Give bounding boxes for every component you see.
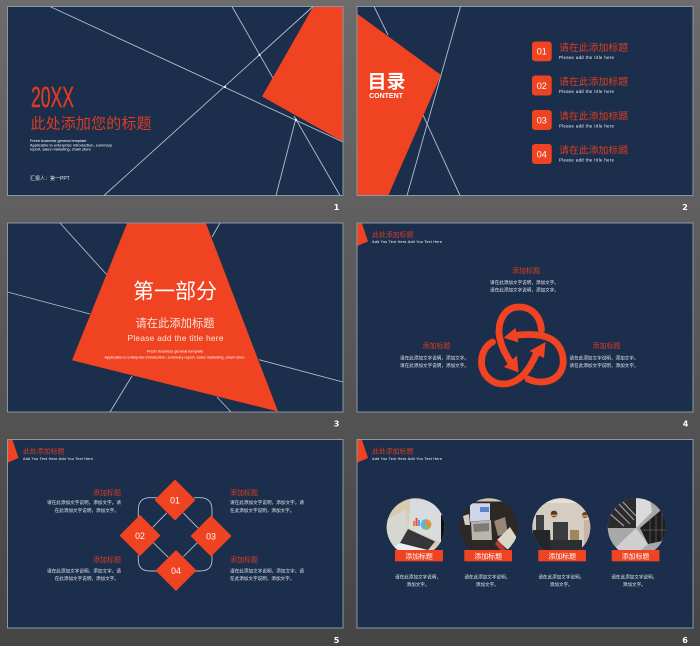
item 04: 请在此添加标题 — [559, 144, 628, 156]
caption 4 — [611, 573, 657, 588]
text block bottom right — [230, 555, 304, 582]
year heading: 20XX — [31, 82, 74, 114]
text block top right — [230, 488, 304, 514]
photo: clothing shop — [531, 498, 592, 551]
item 02: Please add the title here — [559, 89, 615, 94]
description: Applicable to enterprise introduction, summary report, sales marketing, chain store — [104, 354, 244, 360]
photo: desk from above — [459, 497, 519, 552]
description: Fresh business general template — [147, 348, 203, 354]
item 04 — [532, 144, 628, 164]
description: report, sales marketing, chain store — [30, 146, 91, 152]
corner flag — [358, 440, 368, 462]
label bar 3: 添加标题 — [548, 551, 576, 560]
panel: slide 3 section — [8, 223, 343, 412]
caption 4: 请在此添加文字说明， — [611, 573, 657, 580]
diamond 03: 03 — [206, 531, 216, 541]
label bar 3 — [538, 550, 586, 561]
icon: three interlocking arrows — [482, 307, 563, 384]
panel: slide 6 photo row — [357, 440, 693, 628]
background lines — [374, 6, 460, 196]
item 04: Please add the title here — [559, 158, 615, 162]
item 03: 请在此添加标题 — [559, 110, 628, 122]
text block bottom left: 在此添加文字说明，添加文字。 — [55, 575, 119, 582]
caption 2 — [464, 573, 510, 588]
right text block: 请在此添加文字说明，添加文字。 — [570, 362, 638, 369]
caption 1 — [395, 573, 441, 588]
left text block: 请在此添加文字说明，添加文字。 — [400, 354, 469, 361]
slide header: 此处添加标题 — [372, 230, 413, 239]
caption 4: 添加文字。 — [623, 581, 646, 588]
caption 1: 请在此添加文字说明， — [395, 573, 441, 580]
diamond 04 — [156, 550, 196, 591]
presenter: 汇报人：第一PPT — [30, 175, 70, 182]
text block bottom left — [47, 555, 121, 582]
panel: slide 4 cycle diagram — [357, 223, 693, 412]
diamond 01 — [154, 480, 196, 520]
text block bottom right: 请在此添加文字说明，添加文字。请 — [230, 567, 304, 574]
slide subheader: Add You Text Here Add You Text Here — [23, 457, 93, 461]
text block top left: 添加标题 — [93, 488, 121, 497]
english subtitle: Please add the title here — [128, 333, 224, 343]
label bar 4: 添加标题 — [622, 551, 649, 560]
top text block: 请在此添加文字说明，添加文字。 — [490, 279, 559, 286]
diamond 02 — [120, 515, 160, 556]
caption 3: 添加文字。 — [550, 581, 573, 588]
corner flag — [358, 224, 368, 246]
content label: CONTENT — [369, 93, 404, 100]
item 01 — [532, 41, 628, 61]
label bar 2 — [464, 550, 512, 561]
page number 5: 5 — [334, 636, 340, 645]
panel: slide 5 diamond diagram — [8, 440, 343, 628]
page number 2: 2 — [682, 203, 688, 212]
caption 3: 请在此添加文字说明， — [538, 573, 584, 580]
background line network — [50, 6, 343, 196]
item 01: 请在此添加标题 — [559, 41, 628, 54]
page number 3: 3 — [334, 420, 339, 428]
section subtitle: 请在此添加标题 — [135, 316, 215, 330]
photo: grayscale building — [607, 498, 667, 551]
diamond 04: 04 — [171, 566, 181, 576]
text block bottom left: 请在此添加文字说明，添加文字。请 — [47, 567, 121, 574]
text block bottom right: 添加标题 — [230, 555, 258, 564]
slide header: 此处添加标题 — [372, 446, 413, 455]
label bar 4 — [612, 550, 659, 561]
orange polygon — [262, 7, 342, 142]
orange polygon — [72, 224, 278, 412]
left text block — [400, 341, 469, 369]
item 02: 请在此添加标题 — [559, 75, 628, 88]
caption 3 — [538, 573, 584, 588]
diamond 01: 01 — [170, 495, 180, 505]
orange polygon — [358, 14, 441, 195]
description: Fresh business general template — [30, 138, 86, 143]
text block bottom left: 添加标题 — [93, 555, 121, 564]
description — [104, 348, 244, 360]
caption 1: 添加文字。 — [407, 581, 429, 588]
right text block — [570, 341, 638, 369]
section title: 第一部分 — [133, 280, 217, 304]
slide subheader: Add You Text Here Add You Text Here — [372, 240, 442, 244]
item 01: Please add the title here — [559, 55, 615, 60]
right text block: 添加标题 — [592, 341, 620, 350]
page number 1: 1 — [334, 203, 340, 212]
diamond 03 — [190, 516, 232, 556]
description: Applicable to enterprise introduction, summary — [30, 142, 112, 147]
label bar 1: 添加标题 — [405, 551, 433, 560]
slide subheader: Add You Text Here Add You Text Here — [372, 457, 442, 461]
panel: slide 1 cover — [8, 6, 343, 196]
slide header: 此处添加标题 — [23, 446, 64, 455]
top text block: 请在此添加文字说明，添加文字。 — [490, 286, 559, 294]
item 03: 03 — [537, 116, 547, 126]
text block top right: 在此添加文字说明，添加文字。 — [230, 507, 294, 514]
left text block: 请在此添加文字说明，添加文字。 — [400, 362, 469, 369]
text block bottom right: 在此添加文字说明，添加文字。 — [230, 575, 294, 582]
title: 此处添加您的标题 — [30, 116, 152, 132]
text block top right: 请在此添加文字说明，添加文字。请 — [230, 499, 304, 506]
contents heading: 目录 — [367, 71, 406, 93]
connector outline — [138, 498, 212, 571]
text block top left — [47, 488, 121, 514]
item 02 — [532, 75, 628, 96]
panel: slide 2 contents — [357, 6, 693, 196]
left text block: 添加标题 — [422, 341, 450, 350]
caption 2: 请在此添加文字说明， — [464, 573, 510, 580]
photo: laptop with charts — [386, 498, 447, 552]
corner flag — [8, 440, 18, 462]
background lines — [8, 223, 343, 412]
page number 6: 6 — [682, 636, 688, 645]
text block top left: 请在此添加文字说明，添加文字。请 — [47, 499, 121, 506]
item 04: 04 — [537, 150, 547, 160]
label bar 1 — [395, 550, 443, 561]
item 02: 02 — [537, 81, 547, 91]
top text block: 添加标题 — [512, 266, 540, 275]
description — [30, 138, 112, 152]
diamond 02: 02 — [135, 531, 145, 541]
item 03 — [532, 110, 628, 130]
label bar 2: 添加标题 — [474, 551, 502, 560]
item 03: Please add the title here — [559, 124, 615, 128]
right text block: 请在此添加文字说明，添加文字。 — [570, 354, 638, 361]
text block top left: 在此添加文字说明，添加文字。 — [55, 507, 119, 514]
page number 4: 4 — [683, 420, 689, 428]
top text block — [490, 266, 559, 294]
item 01: 01 — [537, 47, 547, 57]
caption 2: 添加文字。 — [476, 581, 499, 588]
text block top right: 添加标题 — [230, 488, 258, 497]
